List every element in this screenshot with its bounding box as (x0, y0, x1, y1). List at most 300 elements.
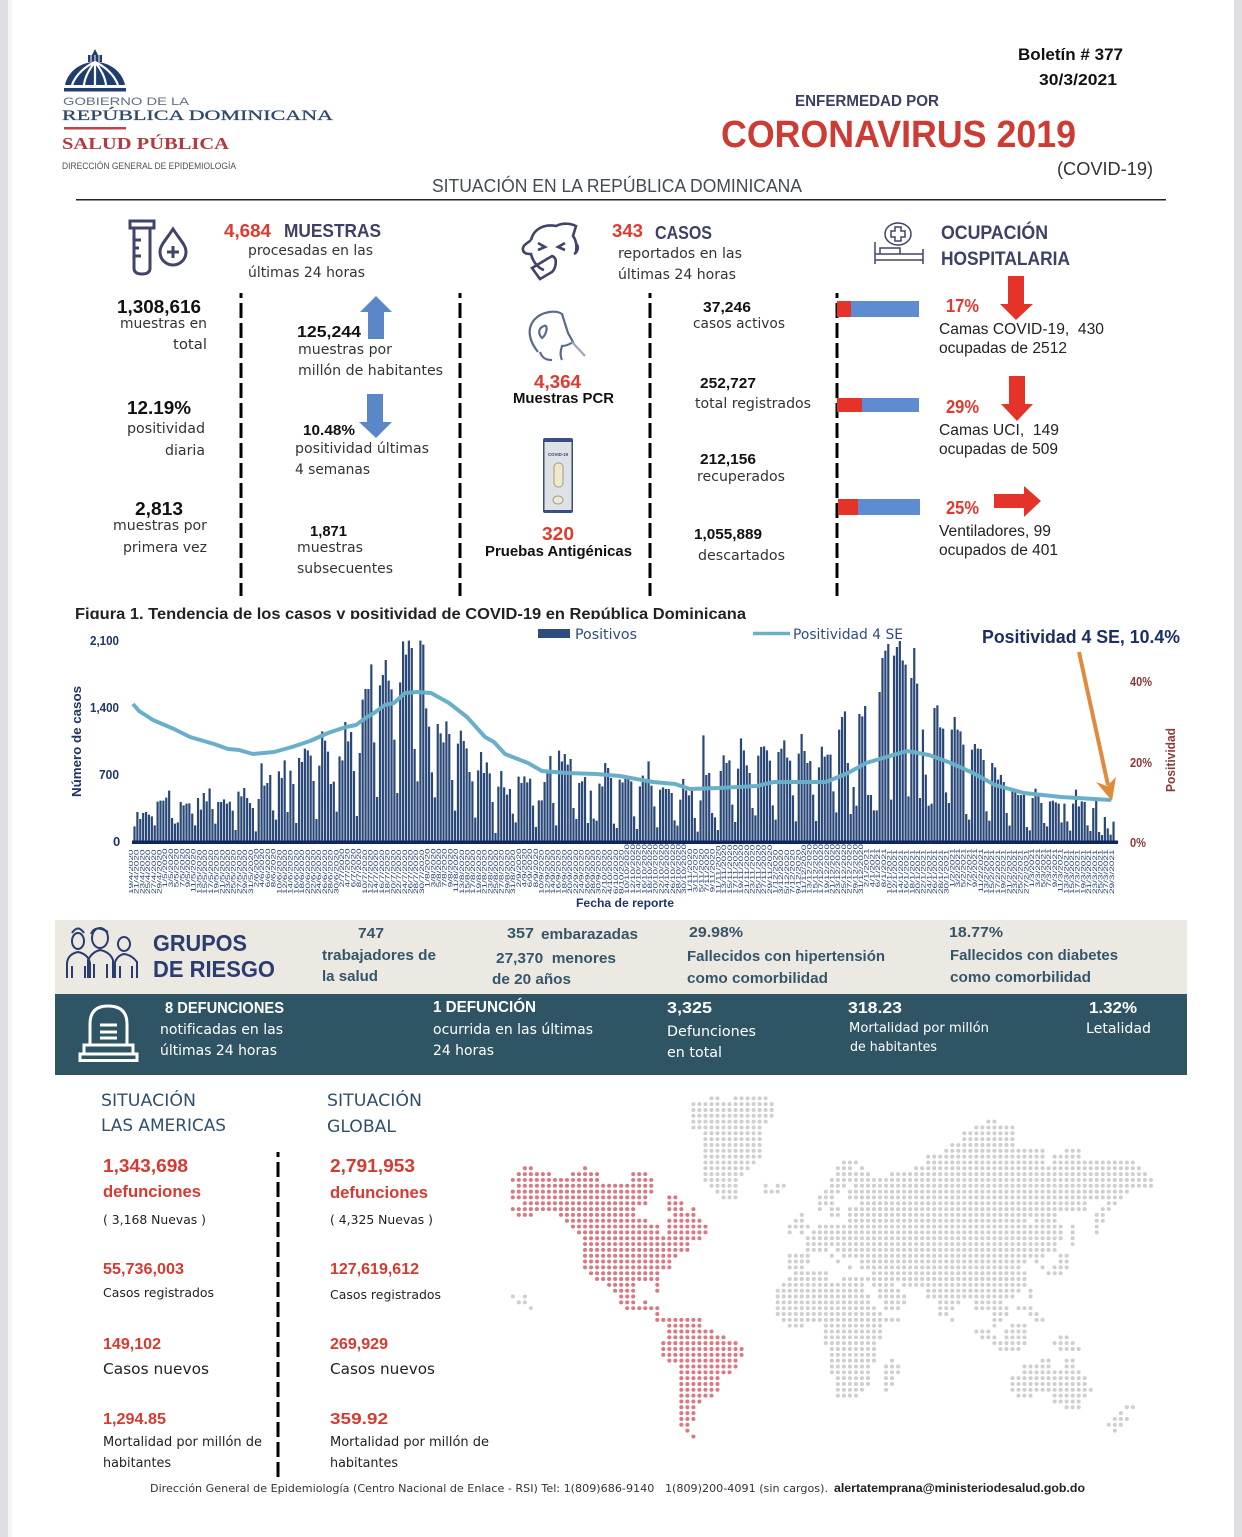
heading: 4,684 muestras: MUESTRAS (284, 221, 381, 241)
chart x axis date labels: 21/11/2020 (745, 845, 751, 894)
panel: situación las américas: Mortalidad por millón de (103, 1435, 262, 1450)
panel: situación global: GLOBAL (327, 1117, 397, 1137)
chart x axis date labels: 30/9/2020 (597, 849, 603, 894)
chart x axis date labels: 27/3/2021 (1104, 849, 1110, 894)
chart x axis date labels: 21/4/2020 (135, 849, 141, 894)
panel: situación las américas: Casos registrados (103, 1285, 214, 1300)
y axis left: 0 (113, 834, 120, 849)
stat: casos activos: casos activos (693, 316, 785, 332)
stat: muestras subsecuentes: subsecuentes (297, 561, 393, 577)
stat: diabetes: Fallecidos con diabetes (950, 947, 1118, 964)
heading: 343 casos: CASOS (655, 223, 712, 243)
chart x axis date labels: 25/3/2021 (1099, 849, 1105, 894)
chart x axis date labels: 21/12/2020 (830, 844, 836, 894)
stat: camas UCI: 29% (946, 397, 979, 417)
heading: 4,684 muestras: últimas 24 horas (248, 265, 365, 281)
chart x axis date labels: 12/10/2020 (631, 844, 637, 894)
chart x axis date labels: 25/11/2020 (756, 845, 762, 894)
chart x axis date labels: 27/11/2020 (762, 845, 768, 894)
chart x axis date labels: 20/7/2020 (391, 849, 397, 894)
chart x axis date labels: 23/8/2020 (488, 849, 494, 894)
bulletin number and date: Boletín # 377 (1018, 45, 1123, 64)
stat: positividad últimas 4 semanas (295, 422, 429, 478)
chart x axis date labels: 12/9/2020 (545, 849, 551, 894)
stat: camas UCI (939, 397, 1059, 458)
stat: pruebas antigénicas: 320 (542, 524, 574, 544)
panel: situación global: Casos registrados (330, 1287, 441, 1302)
panel: muestras (113, 221, 443, 577)
stat: muestras subsecuentes: muestras (297, 540, 363, 556)
chart x axis date labels: 1/11/2020 (688, 849, 694, 893)
chart x axis date labels: 16/1/2021 (905, 849, 911, 894)
stat: muestras en total: 1,308,616 (117, 297, 201, 317)
chart x axis date labels: 12/7/2020 (369, 849, 375, 894)
chart x axis date labels: 1/8/2020 (426, 849, 432, 888)
stat: descartados (694, 526, 785, 564)
stat: ventiladores: 25% (946, 498, 979, 518)
chart x axis date labels: 22/7/2020 (397, 849, 403, 894)
chart x axis date labels: 31/5/2020 (249, 849, 255, 894)
stat: ventiladores (939, 498, 1058, 559)
stat: 8 defunciones: últimas 24 horas (160, 1043, 277, 1059)
panel: situación global: Mortalidad por millón de (330, 1435, 489, 1450)
panel: situación las américas: 1,343,698 (103, 1156, 188, 1176)
panel: situación las américas: 149,102 (103, 1336, 161, 1353)
stat: camas UCI: ocupadas de 509 (939, 441, 1058, 458)
chart x axis date labels: 2/1/2021 (865, 849, 871, 888)
chart x axis date labels: 19/12/2020 (825, 844, 831, 894)
chart x axis date labels: 17/8/2020 (471, 849, 477, 894)
stat: positividad últimas 4 semanas: 4 semanas (295, 462, 370, 478)
footer: Dirección General de Epidemiología (Centro Nacional de Enlace - RSI) Tel: 1(809)686-9140 1(809)200-4091 (sin cargos). (150, 1482, 828, 1495)
stat: trabajadores de la salud: trabajadores de (322, 947, 436, 964)
footer (150, 1481, 1085, 1495)
stat: muestras en total: total (173, 337, 207, 353)
chart x axis date labels: 13/12/2020 (808, 844, 814, 894)
legend: Positividad 4 SE (793, 627, 903, 643)
callout: positividad 4 SE 10.4% (982, 627, 1180, 801)
chart x axis date labels: 5/12/2020 (785, 849, 791, 894)
stat: defunciones en total: en total (667, 1045, 722, 1061)
chart x axis date labels: 27/2/2021 (1024, 849, 1030, 894)
stat: 1 defunción: ocurrida en las últimas (433, 1022, 593, 1038)
icon: face with mask (523, 224, 578, 279)
stat: muestras por millón: muestras por (298, 342, 392, 358)
chart x axis date labels: 29/4/2020 (158, 849, 164, 894)
chart x axis date labels: 19/5/2020 (215, 849, 221, 894)
panel: situación global: SITUACIÓN (327, 1089, 422, 1111)
chart x axis date labels: 17/12/2020 (819, 844, 825, 894)
stat: total registrados: total registrados (695, 396, 811, 412)
title: (COVID-19) (1057, 159, 1153, 179)
panel: situación global: 269,929 (330, 1336, 388, 1353)
y axis right: 0% (1130, 835, 1146, 850)
chart x axis date labels: 14/6/2020 (289, 849, 295, 894)
stat: positividad diaria: diaria (165, 443, 205, 459)
stat: muestras subsecuentes (297, 523, 393, 577)
chart x axis date labels: 5/5/2020 (175, 849, 181, 888)
stat: letalidad: Letalidad (1086, 1021, 1151, 1037)
stat: muestras por primera vez: muestras por (113, 518, 207, 534)
chart x axis date labels: 26/7/2020 (408, 849, 414, 894)
chart x axis date labels: 29/12/2020 (853, 844, 859, 894)
panel: situación las américas: LAS AMERICAS (101, 1116, 226, 1136)
chart x axis date labels: 29/3/2021 (1110, 849, 1116, 894)
chart x axis date labels: 23/4/2020 (140, 849, 146, 894)
chart x axis date labels: 12/1/2021 (893, 849, 899, 894)
panel: grupos de riesgo (55, 920, 1187, 994)
chart x axis date labels: 25/8/2020 (494, 849, 500, 894)
stat: 1 defunción: 1 DEFUNCIÓN (433, 998, 536, 1016)
chart x axis date labels: 30/6/2020 (334, 849, 340, 894)
heading: ocupación hospitalaria: OCUPACIÓN (941, 222, 1048, 244)
y axis right: 40% (1130, 674, 1152, 689)
chart x axis date labels: 13/2/2021 (984, 849, 990, 894)
chart x axis date labels: 15/11/2020 (728, 845, 734, 894)
stat: recuperados: recuperados (697, 469, 785, 485)
chart x axis date labels: 14/9/2020 (551, 849, 557, 894)
chart x axis date labels: 23/12/2020 (836, 844, 842, 894)
panel: situación global: habitantes (330, 1456, 398, 1471)
stat: casos activos: 37,246 (703, 299, 751, 316)
chart x axis date labels: 12/6/2020 (283, 849, 289, 894)
bar chart: casos positivos y positividad (69, 627, 1180, 910)
stat: defunciones en total: 3,325 (667, 1000, 712, 1017)
chart x axis date labels: 20/9/2020 (568, 849, 574, 894)
y axis left: Número de casos (69, 686, 84, 797)
chart x axis date labels: 29/5/2020 (243, 849, 249, 894)
panel: situación las américas: habitantes (103, 1456, 171, 1471)
stat: mortalidad por millón: de habitantes (850, 1040, 937, 1055)
stat: mortalidad por millón (848, 1000, 989, 1055)
chart x axis date labels: 26/1/2021 (933, 849, 939, 894)
chart x axis date labels: 8/1/2021 (882, 849, 888, 888)
panel: situación las américas: ( 3,168 Nuevas ) (103, 1212, 206, 1227)
chart x axis date labels: 14/10/2020 (637, 844, 643, 894)
chart x axis date labels: 5/8/2020 (437, 849, 443, 888)
chart x axis date labels: 31/12/2020 (859, 844, 865, 894)
stat: muestras por primera vez (113, 499, 207, 556)
chart x axis date labels: 21/5/2020 (220, 849, 226, 894)
chart x axis date labels: 7/5/2020 (180, 849, 186, 888)
dashed column dividers (241, 293, 837, 1480)
chart x axis date labels: 1/3/2021 (1030, 849, 1036, 888)
arrow: red right ventiladores (994, 486, 1041, 517)
chart x axis date labels: 21/2/2021 (1007, 849, 1013, 894)
bulletin number and date: 30/3/2021 (1039, 72, 1117, 89)
legend (538, 627, 903, 643)
callout: positividad 4 SE 10.4%: Positividad 4 SE, 10.4% (982, 627, 1180, 647)
chart x axis date labels: 4/6/2020 (260, 849, 266, 888)
chart x axis date labels: 30/1/2021 (945, 849, 951, 894)
chart x axis date labels: 28/9/2020 (591, 849, 597, 894)
stat: positividad últimas 4 semanas: 10.48% (303, 422, 355, 439)
stat: muestras en total (117, 297, 207, 353)
heading: 4,684 muestras: procesadas en las (248, 243, 373, 259)
chart x axis date labels: 11/2/2021 (979, 849, 985, 893)
chart x axis date labels: 3/3/2021 (1036, 849, 1042, 888)
chart x axis date labels: 20/10/2020 (654, 844, 660, 894)
stat: 8 defunciones: 8 DEFUNCIONES (165, 1000, 284, 1017)
stat: hipertensión: Fallecidos con hipertensión (687, 948, 885, 965)
chart x axis date labels: 2/7/2020 (340, 849, 346, 888)
title (76, 93, 1166, 200)
stat: descartados: descartados (698, 548, 785, 564)
stat: camas COVID-19: Camas COVID-19, 430 (939, 321, 1104, 338)
stat: recuperados (697, 451, 785, 485)
chart x axis date labels: 2/6/2020 (254, 849, 260, 888)
bar: ventiladores 25% (838, 499, 920, 515)
stat: camas COVID-19: 17% (946, 296, 979, 316)
stat: pruebas antigénicas (485, 524, 632, 560)
stat: total registrados (695, 375, 811, 412)
arrow: up (360, 296, 392, 339)
y axis left (69, 633, 120, 849)
chart x axis date labels: 8/7/2020 (357, 849, 363, 888)
chart x axis date labels: 23/5/2020 (226, 849, 232, 894)
chart x axis date labels: 16/10/2020 (642, 844, 648, 894)
stat: mortalidad por millón: Mortalidad por millón (849, 1021, 989, 1036)
title: ENFERMEDAD POR (795, 93, 939, 110)
heading: 4,684 muestras (224, 221, 381, 281)
chart x axis date labels: 15/2/2021 (990, 849, 996, 894)
chart x axis date labels: 7/3/2021 (1047, 849, 1053, 888)
stat: camas COVID-19 (939, 296, 1104, 357)
stat: trabajadores de la salud (322, 925, 436, 985)
logo: Gobierno de la República Dominicana (62, 49, 333, 171)
bars: positivos (134, 641, 1114, 842)
chart x axis date labels: 6/1/2021 (876, 849, 882, 888)
chart x axis date labels: 24/10/2020 (665, 844, 671, 894)
heading: grupos de riesgo: DE RIESGO (153, 956, 275, 982)
chart x axis date labels: 10/10/2020 (625, 844, 631, 894)
chart x axis date labels: 19/3/2021 (1081, 849, 1087, 894)
icon: tombstone (80, 1006, 137, 1060)
stat: camas UCI: Camas UCI, 149 (939, 422, 1059, 439)
legend: Positivos (575, 627, 637, 643)
icon: nasal swab (530, 312, 585, 360)
chart x axis date labels: 8/9/2020 (534, 849, 540, 888)
panel: casos (485, 221, 811, 564)
stat: defunciones en total: Defunciones (667, 1024, 756, 1040)
y axis right: Positividad (1163, 728, 1178, 792)
map: Americas highlighted (513, 1168, 742, 1436)
chart x axis date labels: 9/3/2021 (1053, 849, 1059, 888)
stat: 8 defunciones (160, 1000, 284, 1059)
chart x axis date labels: 25/4/2020 (146, 849, 152, 894)
map: rest of world (513, 1098, 1152, 1431)
panel: situación global: defunciones (330, 1183, 428, 1202)
chart x axis date labels: 22/9/2020 (574, 849, 580, 894)
stat: defunciones en total (667, 1000, 756, 1061)
chart x axis date labels: 23/11/2020 (751, 845, 757, 894)
chart x axis date labels: 3/11/2020 (694, 849, 700, 893)
panel: situación global: Casos nuevos (330, 1360, 435, 1378)
chart x axis date labels: 9/11/2020 (711, 849, 717, 893)
logo: Gobierno de la República Dominicana: REPÚBLICA DOMINICANA (62, 107, 333, 124)
panel: situación global: 2,791,953 (330, 1156, 415, 1176)
stat: positividad diaria (127, 398, 205, 459)
stat: muestras por millón: 125,244 (297, 324, 361, 341)
chart x axis date labels: 13/5/2020 (197, 849, 203, 894)
stat: hipertensión: como comorbilidad (687, 970, 828, 987)
chart x axis date labels: 2/10/2020 (602, 849, 608, 894)
icon: antigen test cassette: COVID-19 (548, 452, 568, 457)
logo: Gobierno de la República Dominicana: GOBIERNO DE LA (63, 96, 190, 108)
stat: casos activos (693, 299, 785, 332)
stat: embarazadas y menores: 357 (507, 925, 534, 942)
chart x axis date labels: 15/8/2020 (465, 849, 471, 894)
chart x axis date labels: 3/12/2020 (779, 849, 785, 894)
stat: letalidad (1086, 1000, 1151, 1037)
x axis title: Fecha de reporte (576, 896, 674, 910)
chart x axis date labels: 18/1/2021 (910, 849, 916, 894)
stat: muestras por primera vez: 2,813 (135, 499, 183, 519)
chart x axis date labels: 6/9/2020 (528, 849, 534, 888)
chart heading: Figura 1. Tendencia de los casos y positividad de COVID-19 en República Dominicana (75, 606, 746, 623)
stat: positividad últimas 4 semanas: positividad últimas (295, 441, 429, 457)
stat: trabajadores de la salud: 747 (358, 925, 384, 942)
chart x axis date labels: 11/11/2020 (716, 845, 722, 894)
chart x axis date labels: 13/3/2021 (1064, 849, 1070, 894)
chart x axis date labels: 1/12/2020 (773, 849, 779, 894)
dotted world map (513, 1098, 1152, 1436)
bar: camas UCI 29% (837, 398, 919, 412)
chart x axis date labels: 27/4/2020 (152, 849, 158, 894)
chart x axis date labels: 27/5/2020 (237, 849, 243, 894)
icon: hospital bed (875, 223, 923, 264)
panel: ocupación hospitalaria (837, 222, 1104, 559)
chart x axis date labels: 6/6/2020 (266, 849, 272, 888)
chart x axis date labels: 29/11/2020 (768, 845, 774, 894)
heading: 343 casos: últimas 24 horas (618, 267, 736, 283)
stat: letalidad: 1.32% (1089, 1000, 1137, 1017)
bar: camas COVID 17% (837, 301, 919, 317)
stat: embarazadas y menores: de 20 años (492, 971, 571, 988)
chart x axis date labels: 18/10/2020 (648, 844, 654, 894)
stat: hipertensión (687, 924, 885, 987)
heading: grupos de riesgo (153, 930, 275, 982)
stat: pruebas antigénicas: Pruebas Antigénicas (485, 543, 632, 560)
panel: situación global: 359.92 (330, 1411, 388, 1428)
stat: muestras por millón: millón de habitantes (298, 363, 443, 379)
stat: embarazadas y menores (492, 925, 638, 988)
panel: situación global: ( 4,325 Nuevas ) (330, 1212, 433, 1227)
chart x axis date labels: 7/8/2020 (443, 849, 449, 888)
chart x axis date labels: 6/10/2020 (614, 849, 620, 894)
chart x axis date labels: 11/8/2020 (454, 849, 460, 893)
chart x axis date labels: 16/9/2020 (557, 849, 563, 894)
chart x axis date labels: 17/11/2020 (734, 845, 740, 894)
stat: 8 defunciones: notificadas en las (160, 1022, 283, 1038)
stat: 1 defunción: 24 horas (433, 1043, 494, 1059)
stat: mortalidad por millón: 318.23 (848, 1000, 902, 1017)
y axis right (1130, 674, 1178, 850)
stat: diabetes: como comorbilidad (950, 969, 1091, 986)
title: CORONAVIRUS 2019 (721, 114, 1076, 156)
chart x axis date labels: 19/11/2020 (739, 845, 745, 894)
y axis left: 2,100 (90, 633, 119, 648)
chart x axis date labels: 9/12/2020 (796, 849, 802, 894)
footer: alertatemprana@ministeriodesalud.gob.do (834, 1481, 1085, 1495)
panel: situación las américas: Casos nuevos (103, 1360, 209, 1378)
chart x axis date labels: 24/9/2020 (580, 849, 586, 894)
stat: muestras PCR: 4,364 (534, 372, 581, 392)
heading: 343 casos: reportados en las (618, 246, 742, 262)
chart x axis date labels: 2/9/2020 (517, 849, 523, 888)
stat: descartados: 1,055,889 (694, 526, 762, 543)
chart x axis date labels: 14/7/2020 (374, 849, 380, 894)
chart x axis date labels: 26/6/2020 (323, 849, 329, 894)
chart x axis date labels: 6/7/2020 (351, 849, 357, 888)
chart x axis date labels: 30/10/2020 (682, 844, 688, 894)
chart x axis date labels: 10/6/2020 (277, 849, 283, 894)
chart x axis date labels: 10/7/2020 (363, 849, 369, 894)
stat: total registrados: 252,727 (700, 375, 756, 392)
arrow: red down camas COVID (1000, 276, 1033, 320)
stat: muestras por primera vez: primera vez (123, 540, 207, 556)
chart x axis date labels: 16/6/2020 (294, 849, 300, 894)
stat: trabajadores de la salud: la salud (322, 968, 378, 985)
chart x axis date labels: 15/5/2020 (203, 849, 209, 894)
chart x axis date labels: 22/6/2020 (312, 849, 318, 894)
chart x axis date labels: 4/7/2020 (346, 849, 352, 888)
chart x axis date labels: 19/2/2021 (1002, 849, 1008, 894)
chart x axis date labels: 5/3/2021 (1042, 849, 1048, 888)
chart x axis date labels: 28/7/2020 (414, 849, 420, 894)
chart x axis date labels: 25/2/2021 (1019, 849, 1025, 894)
chart x axis date labels: 15/12/2020 (813, 844, 819, 894)
chart x axis date labels: 7/2/2021 (967, 849, 973, 888)
panel: situación global: 127,619,612 (330, 1261, 419, 1278)
chart x axis date labels: 30/7/2020 (420, 849, 426, 894)
stat: muestras por millón (297, 324, 443, 379)
chart x axis date labels: 23/3/2021 (1093, 849, 1099, 894)
panel: situación las américas: defunciones (103, 1182, 201, 1201)
stat: ventiladores: ocupados de 401 (939, 542, 1058, 559)
stat: camas COVID-19: ocupadas de 2512 (939, 340, 1067, 357)
chart x axis date labels: 22/1/2021 (922, 849, 928, 894)
chart x axis date labels: 25/12/2020 (842, 844, 848, 894)
stat: muestras PCR: Muestras PCR (513, 390, 614, 407)
chart x axis date labels: 28/6/2020 (329, 849, 335, 894)
chart x axis date labels: 26/10/2020 (671, 844, 677, 894)
icon: test tube and blood drop (130, 221, 186, 274)
chart x axis date labels: 8/6/2020 (272, 849, 278, 888)
stat: 1 defunción (433, 998, 593, 1059)
chart x axis date labels: 28/1/2021 (939, 849, 945, 894)
chart x axis date labels: 3/8/2020 (431, 849, 437, 888)
heading: 343 casos (612, 221, 742, 283)
chart x axis date labels: 5/11/2020 (699, 849, 705, 893)
chart x axis date labels: 9/8/2020 (448, 849, 454, 888)
chart x axis date labels: 21/8/2020 (483, 849, 489, 894)
chart x axis date labels: 11/3/2021 (1059, 849, 1065, 893)
chart x axis date labels: 19/8/2020 (477, 849, 483, 894)
stat: muestras en total: muestras en (120, 316, 207, 332)
chart x axis date labels: 7/11/2020 (705, 849, 711, 893)
stat: diabetes: 18.77% (949, 924, 1003, 941)
chart x axis date labels: 26/9/2020 (585, 849, 591, 894)
chart x axis date labels: 24/6/2020 (317, 849, 323, 894)
icon: three people (67, 928, 137, 978)
chart x axis date labels: 27/12/2020 (848, 844, 854, 894)
panel: situación las américas (101, 1089, 262, 1471)
logo: Gobierno de la República Dominicana: SALUD PÚBLICA (62, 134, 230, 153)
chart x axis date labels: 11/5/2020 (192, 849, 198, 893)
chart x axis date labels: 19/4/2020 (129, 849, 135, 894)
y axis left: 700 (99, 767, 119, 782)
